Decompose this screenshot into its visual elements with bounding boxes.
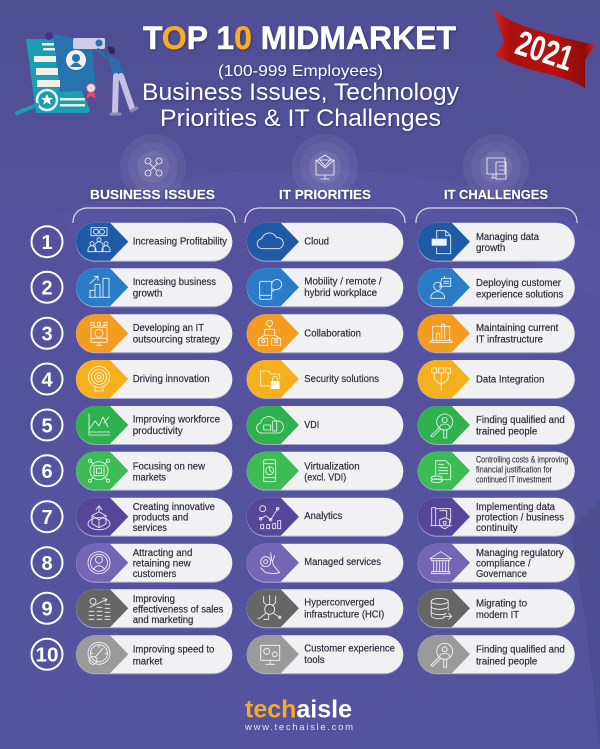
icon: analytics — [259, 506, 281, 529]
business issue 1 pill — [76, 223, 232, 262]
label: markets — [133, 473, 166, 484]
title: Business Issues, Technology — [142, 79, 460, 106]
icon: product box — [88, 506, 110, 530]
ribbon: 2021 — [493, 7, 595, 88]
icon: monitor with gears — [261, 645, 280, 664]
IT challenge 7 pill — [418, 498, 575, 537]
number 4: 4 — [41, 369, 53, 391]
number 10 — [32, 639, 62, 670]
label: VDI — [304, 420, 319, 431]
number 1 — [32, 226, 62, 257]
number 9: 9 — [41, 599, 53, 621]
label: Improving workforce — [133, 415, 220, 426]
number 3 — [32, 318, 62, 349]
label — [133, 277, 216, 299]
label: products and — [133, 513, 188, 524]
business issue 8 pill — [76, 544, 232, 583]
label — [476, 645, 565, 667]
label: effectiveness of sales — [133, 604, 223, 615]
label: customers — [133, 569, 176, 580]
label: Cloud — [304, 237, 329, 248]
icon: data integration — [432, 368, 451, 391]
title — [142, 20, 460, 132]
number 6 — [32, 455, 62, 486]
number 7: 7 — [41, 507, 53, 529]
IT challenge 4 pill — [418, 360, 575, 399]
label — [476, 455, 568, 486]
IT challenge 9 pill — [418, 589, 575, 628]
title: Priorities & IT Challenges — [160, 105, 441, 132]
icon: customer circle — [88, 552, 110, 574]
label: Deploying customer — [476, 278, 562, 289]
number 5: 5 — [41, 415, 53, 437]
icon: invoice and coins — [431, 461, 451, 482]
bracket: business issues — [73, 208, 235, 223]
title: TOP 10 MIDMARKET — [143, 20, 456, 56]
label: continued IT investment — [476, 475, 552, 486]
IT challenge 3 pill — [418, 314, 575, 353]
label: trained people — [476, 426, 538, 438]
IT challenge 8 pill — [418, 544, 575, 583]
icon: productivity chart — [89, 414, 110, 435]
label: Governance — [476, 569, 527, 580]
label — [133, 502, 215, 534]
label — [133, 415, 220, 437]
number 8: 8 — [41, 553, 53, 575]
IT priority 2 pill — [247, 268, 403, 307]
business issue 4 pill — [76, 360, 232, 399]
IT priority 7 pill — [247, 498, 403, 537]
number 7 — [32, 501, 62, 532]
icon: target markets — [88, 459, 110, 482]
icon: data protection — [431, 508, 452, 529]
IT challenge 5 pill — [418, 406, 575, 445]
IT priority 8 pill — [247, 544, 403, 583]
label — [133, 461, 206, 484]
IT priority 4 pill — [247, 360, 403, 399]
business issue 2 pill — [76, 268, 232, 307]
label — [133, 548, 192, 580]
label: Developing an IT — [133, 323, 204, 334]
label: Hyperconverged — [304, 598, 375, 609]
label: infrastructure (HCI) — [304, 609, 384, 620]
heading icon: IT priorities — [292, 134, 358, 200]
label — [133, 323, 220, 345]
label — [133, 645, 215, 667]
icon: growth bars — [89, 276, 110, 297]
label: growth — [133, 288, 162, 299]
number 10: 10 — [36, 645, 58, 667]
heading: IT challenges: IT CHALLENGES — [444, 187, 548, 202]
label: Maintaining current — [476, 323, 559, 334]
label: Mobility / remote / — [304, 277, 382, 288]
IT priority 10 pill — [247, 635, 403, 674]
number 2 — [32, 272, 62, 303]
label: compliance / — [476, 559, 531, 570]
label — [476, 548, 564, 580]
label: financial justification for — [476, 465, 552, 476]
label: trained people — [476, 656, 538, 667]
number 8 — [32, 547, 62, 578]
icon: app file — [432, 231, 451, 254]
label: market — [133, 656, 163, 667]
label: experience solutions — [476, 289, 563, 300]
heading: IT priorities: IT PRIORITIES — [279, 187, 371, 202]
label: Analytics — [304, 511, 342, 522]
IT challenge 10 pill — [418, 635, 575, 674]
label: hybrid workplace — [304, 288, 377, 299]
icon: hyperconverged network — [258, 595, 281, 619]
icon: cloud desktop — [257, 417, 283, 433]
label — [304, 643, 395, 666]
IT priority 6 pill — [247, 452, 403, 491]
IT priority 1 pill — [247, 223, 403, 262]
label — [476, 278, 563, 300]
label: productivity — [133, 426, 183, 437]
label: Implementing data — [476, 502, 555, 513]
label: protection / business — [476, 513, 564, 524]
heading icon: IT challenges — [463, 134, 529, 200]
number 5 — [32, 410, 62, 440]
label: Virtualization — [304, 461, 360, 472]
icon: cloud — [257, 233, 283, 249]
business issue 7 pill — [76, 498, 232, 537]
business issue 10 pill — [76, 635, 232, 674]
label: outsourcing strategy — [133, 334, 220, 345]
label: Improving speed to — [133, 645, 215, 656]
icon: database migration — [431, 598, 452, 619]
bracket: IT priorities — [245, 208, 405, 223]
label — [304, 277, 382, 299]
label: services — [133, 523, 167, 534]
IT priority 5 pill — [247, 406, 403, 445]
bracket: IT challenges — [416, 208, 577, 223]
icon: sales chart — [89, 598, 110, 619]
business issue 6 pill — [76, 452, 232, 491]
label: and marketing — [133, 615, 193, 626]
label: Increasing business — [133, 277, 216, 288]
label: Finding qualified and — [476, 645, 565, 656]
logo: techaisle: www.techaisle.com — [244, 722, 353, 733]
label: IT infrastructure — [476, 334, 543, 345]
number 1: 1 — [41, 232, 53, 254]
number 2: 2 — [41, 278, 53, 300]
IT challenge 2 pill — [418, 268, 575, 307]
icon: magnifier person — [431, 414, 453, 438]
icon: speedometer — [88, 642, 110, 664]
number 9 — [32, 593, 62, 624]
label: Security solutions — [304, 374, 379, 385]
label: Focusing on new — [133, 461, 206, 472]
label — [304, 598, 384, 620]
business issue 5 pill — [76, 406, 232, 445]
icon: collaboration people — [259, 320, 281, 345]
title: (100-999 Employees) — [218, 63, 383, 80]
icon: laptop chart — [430, 324, 453, 342]
label: Creating innovative — [133, 502, 215, 513]
label — [476, 415, 565, 438]
icon: money and people — [88, 228, 110, 252]
label: Attracting and — [133, 548, 192, 559]
heading: business issues: BUSINESS ISSUES — [90, 187, 215, 202]
label — [476, 598, 527, 621]
label — [133, 594, 223, 626]
label — [476, 232, 539, 254]
label: Customer experience — [304, 643, 395, 654]
logo: techaisle: techaisle — [245, 696, 352, 724]
label: Managing regulatory — [476, 548, 564, 559]
IT priority 9 pill — [247, 589, 403, 628]
label: Collaboration — [304, 329, 361, 340]
label: retaining new — [133, 559, 191, 570]
label: Increasing Profitability — [133, 237, 227, 248]
ribbon: 2021: 2021 — [511, 24, 578, 79]
icon: locked folder — [261, 371, 280, 389]
icon: hand with gear — [261, 553, 280, 574]
icon: magnifier person — [431, 643, 453, 667]
label — [304, 461, 360, 484]
label: Data Integration — [476, 375, 544, 386]
label: modern IT — [476, 610, 519, 621]
label: Improving — [133, 594, 175, 605]
IT challenge 6 pill — [418, 452, 575, 491]
IT challenge 1 pill — [418, 223, 575, 262]
icon: customer feedback — [431, 276, 451, 298]
label: continuity — [476, 523, 518, 534]
label — [476, 323, 559, 345]
icon: innovation bulb — [88, 366, 110, 391]
label: tools — [304, 655, 325, 666]
icon: outsourcing monitor — [91, 322, 107, 345]
icon: government building — [430, 552, 452, 574]
number 3: 3 — [41, 324, 53, 346]
label: growth — [476, 243, 505, 254]
label: Finding qualified and — [476, 415, 565, 426]
label: Migrating to — [476, 598, 527, 609]
label: (excl. VDI) — [304, 473, 346, 484]
label: Controlling costs & improving — [476, 455, 568, 466]
number 4 — [32, 364, 62, 394]
illustration: documents and person — [17, 32, 137, 114]
label: Managing data — [476, 232, 539, 243]
label — [476, 502, 564, 534]
heading icon: business issues — [120, 134, 186, 200]
business issue 9 pill — [76, 589, 232, 628]
icon: phone virtualization — [264, 460, 276, 482]
label: Driving innovation — [133, 374, 210, 385]
icon: mobile and chat — [260, 279, 282, 299]
number 6: 6 — [41, 461, 53, 483]
business issue 3 pill — [76, 314, 232, 353]
IT priority 3 pill — [247, 314, 403, 353]
label: Managed services — [304, 557, 381, 568]
